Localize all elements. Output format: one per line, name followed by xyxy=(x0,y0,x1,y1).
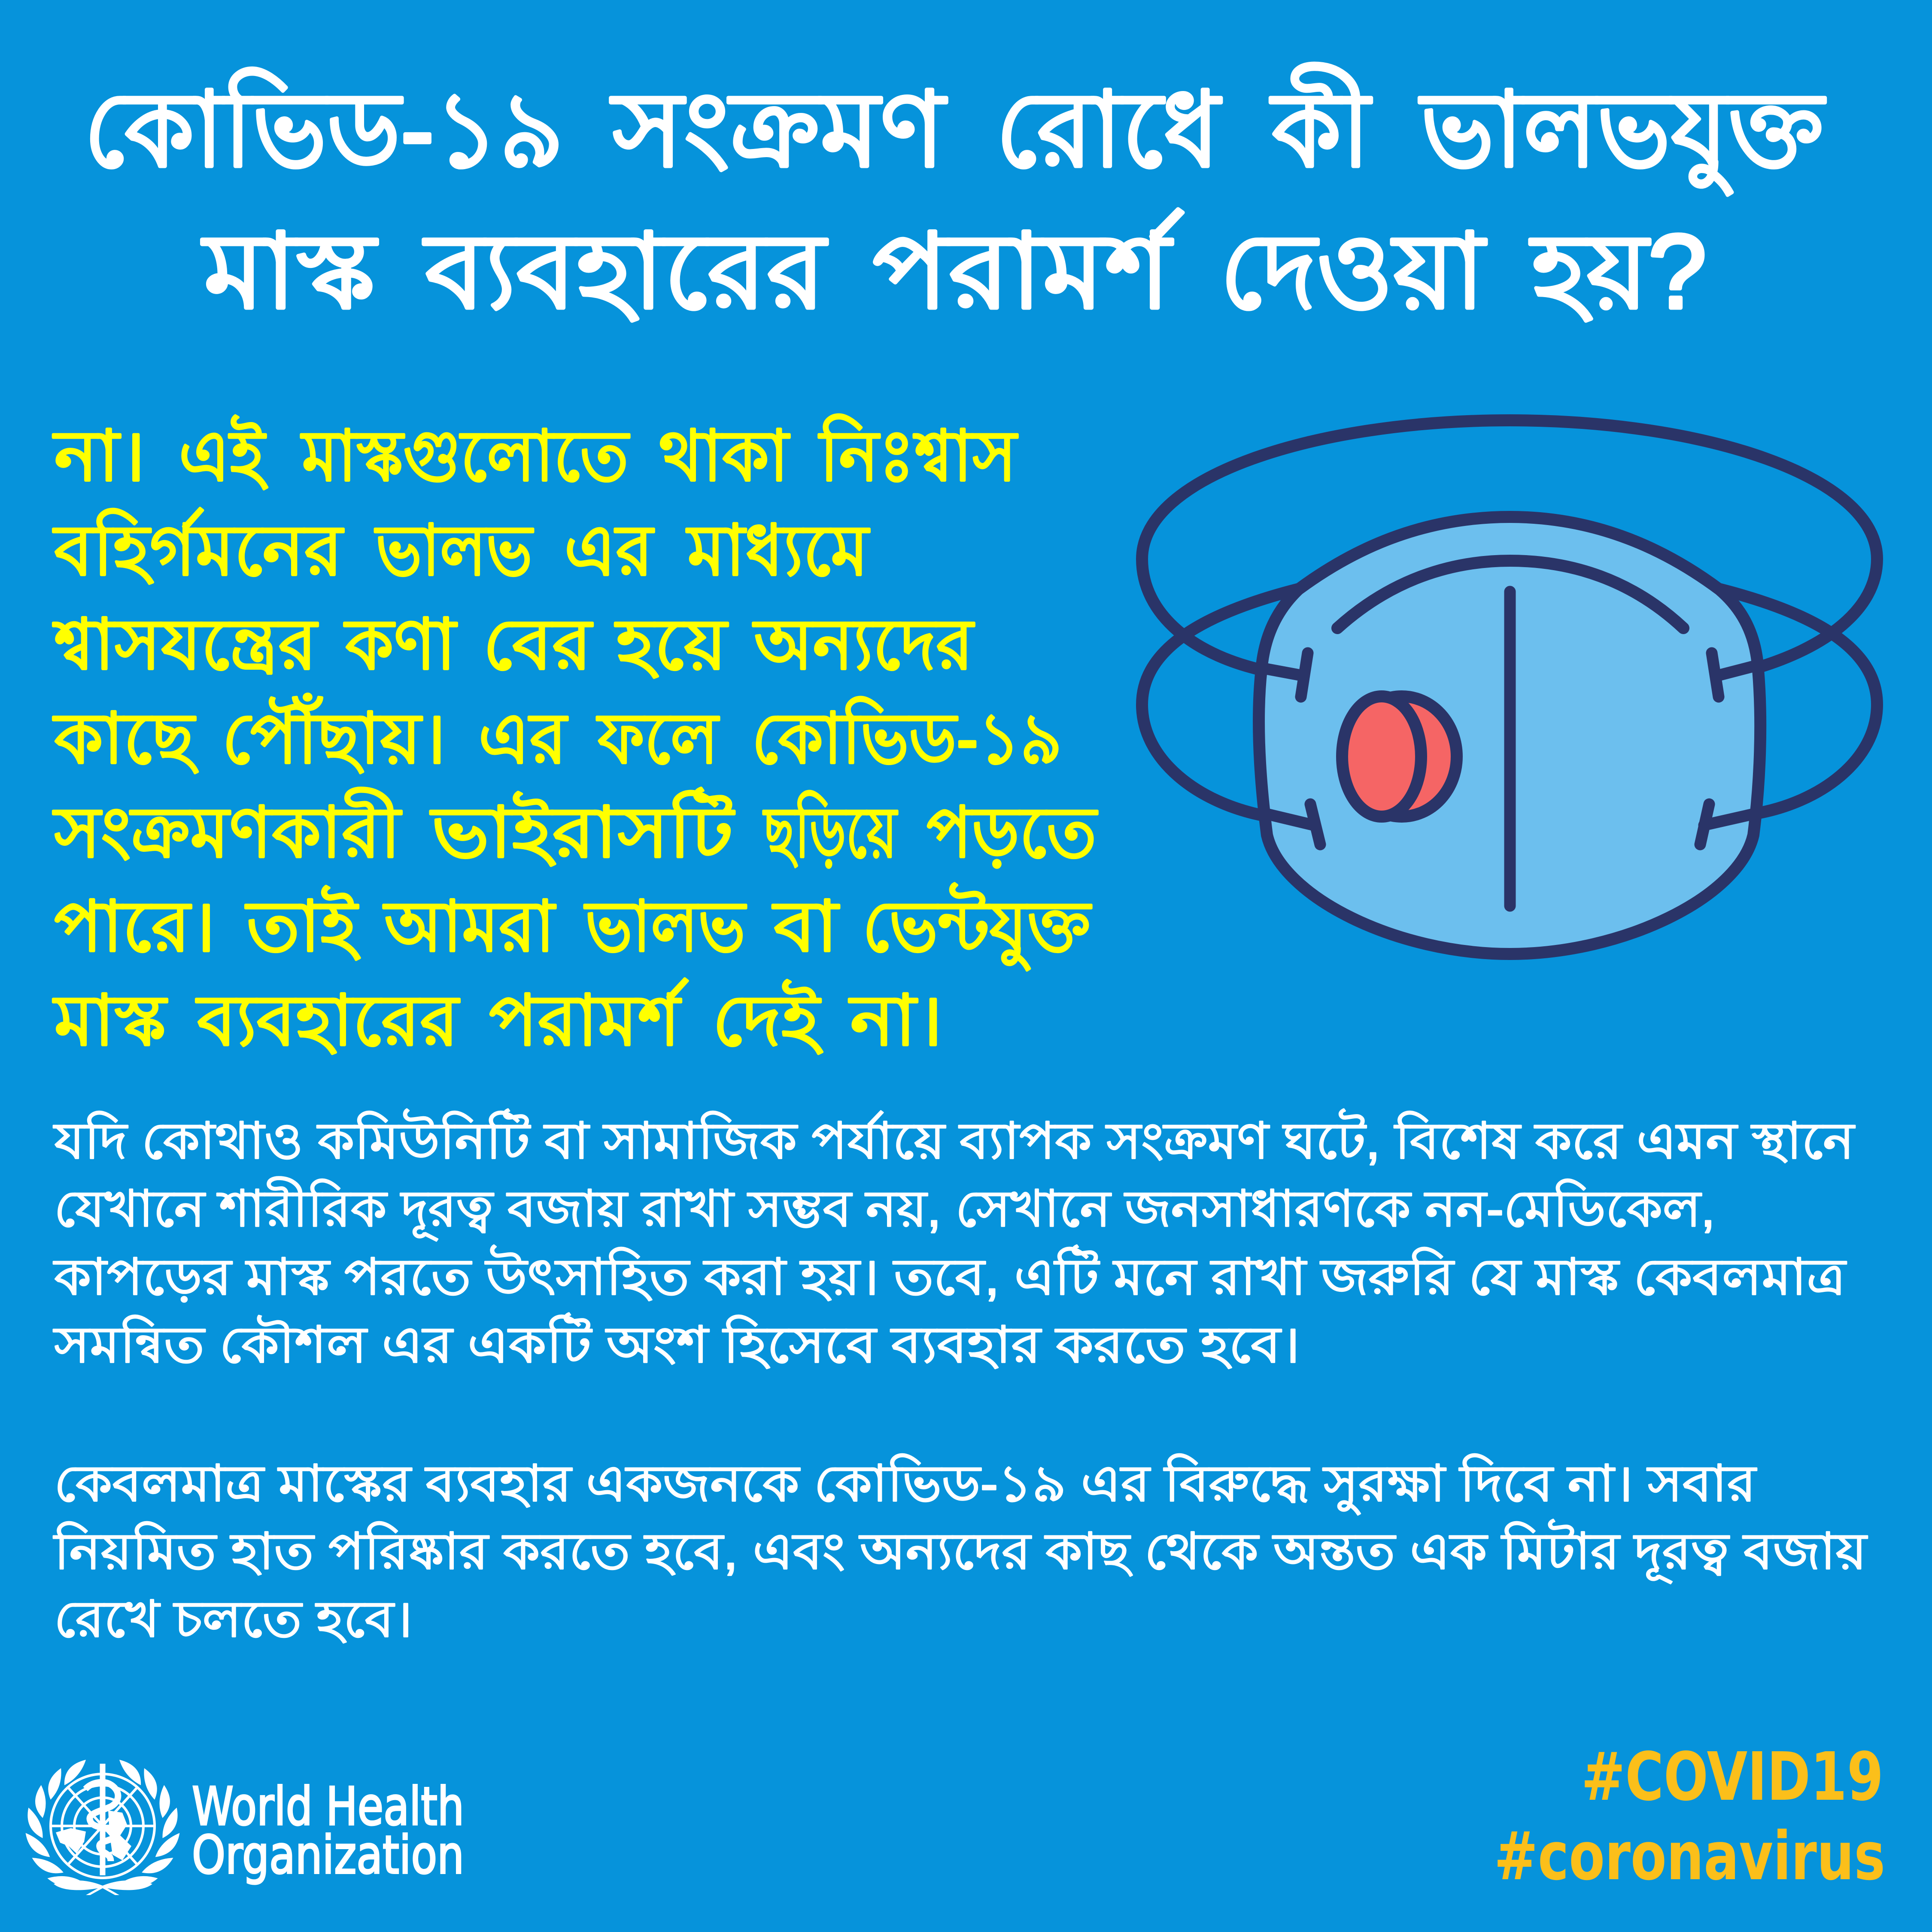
continents xyxy=(56,1810,131,1860)
yellow answer text block: শ্বাসযন্ত্রের xyxy=(53,605,318,684)
yellow answer text block: দেই xyxy=(712,980,822,1060)
body text block 2: রেখে চলতে হবে। xyxy=(54,1591,413,1648)
yellow answer text block: হয়ে xyxy=(615,605,728,684)
centre seam xyxy=(1504,592,1516,906)
yellow answer text block: সংক্রমণকারী xyxy=(53,788,402,872)
yellow answer text block: ফলে xyxy=(596,699,720,778)
yellow answer text block: ছড়িয়ে xyxy=(763,791,898,872)
yellow answer text block: অন্যদের xyxy=(753,605,974,684)
yellow answer text block: কণা xyxy=(344,605,457,684)
body text block 2 xyxy=(53,1454,1868,1648)
lower ear strap xyxy=(1142,588,1877,816)
title line 2: দেওয়া xyxy=(1220,213,1486,330)
laurel wreath xyxy=(25,1759,180,1895)
ribbon xyxy=(54,1880,152,1895)
yellow answer text block: কোভিড-১৯ xyxy=(752,697,1062,778)
upper ear strap xyxy=(1142,420,1877,672)
yellow answer text block: পৌঁছায়। xyxy=(222,694,446,778)
yellow answer text block: তাই xyxy=(245,886,360,966)
icon: WHO emblem xyxy=(25,1759,180,1895)
title line 2 xyxy=(202,210,1707,330)
title line 2: মাস্ক xyxy=(202,213,377,330)
yellow answer text block: বের xyxy=(483,605,592,684)
yellow answer text block: ভাইরাসটি xyxy=(430,788,735,872)
title line 1: ভালভযুক্ত xyxy=(1419,71,1826,195)
title line 2: পরামর্শ xyxy=(872,210,1183,330)
yellow answer text block: থাকা xyxy=(659,416,790,495)
title line 1: কোভিড-১৯ xyxy=(84,68,564,188)
yellow answer text block: নিঃশ্বাস xyxy=(818,415,1018,495)
WHO wordmark xyxy=(192,1776,464,1886)
title line 1: রোধে xyxy=(996,71,1221,188)
title line 2: ব্যবহারের xyxy=(423,213,827,330)
title line 1: সংক্রমণ xyxy=(611,71,947,188)
yellow answer text block: ব্যবহারের xyxy=(196,981,459,1060)
yellow answer text block: এর xyxy=(564,511,654,590)
yellow answer text block: কাছে xyxy=(53,699,198,778)
body text block 1: যদি কোথাও কমিউনিটি বা সামাজিক পর্যায়ে ব্যাপক সংক্রমণ ঘটে, বিশেষ করে এমন স্থানে xyxy=(53,1109,1855,1170)
title line 2: হয়? xyxy=(1530,213,1707,330)
yellow answer text block: ভেন্টযুক্ত xyxy=(863,884,1091,970)
title line 1: কী xyxy=(1270,64,1372,188)
yellow answer text block: বা xyxy=(772,887,839,966)
yellow answer text block: মাস্ক xyxy=(53,981,167,1060)
body text block 2: নিয়মিত হাত পরিষ্কার করতে হবে, এবং অন্যদের কাছ থেকে অন্তত এক মিটার দূরত্ব বজায় xyxy=(53,1519,1868,1583)
hashtags xyxy=(1494,1738,1885,1895)
WHO wordmark: Organization xyxy=(192,1825,464,1886)
body text block 1 xyxy=(53,1109,1855,1373)
body text block 1: কাপড়ের মাস্ক পরতে উৎসাহিত করা হয়। তবে, এটি মনে রাখা জরুরি যে মাস্ক কেবলমাত্র xyxy=(53,1245,1847,1306)
yellow answer text block: না। xyxy=(849,981,943,1060)
title line 1 xyxy=(84,64,1826,195)
title xyxy=(84,64,1826,330)
yellow answer text block: পড়তে xyxy=(927,793,1097,872)
yellow answer text block: আমরা xyxy=(383,887,556,966)
yellow answer text block: মাস্কগুলোতে xyxy=(301,416,629,495)
yellow answer text block xyxy=(53,415,1097,1060)
yellow answer text block: বহির্গমনের xyxy=(53,508,343,590)
mask body xyxy=(1259,517,1760,954)
exhalation valve xyxy=(1342,696,1457,817)
yellow answer text block: ভালভ xyxy=(584,887,747,966)
yellow answer text block: এই xyxy=(179,416,267,495)
yellow answer text block: পরামর্শ xyxy=(489,979,688,1060)
body text block 1: যেখানে শারীরিক দূরত্ব বজায় রাখা সম্ভব নয়, সেখানে জনসাধারণকে নন-মেডিকেল, xyxy=(54,1177,1715,1241)
icon: valve mask xyxy=(1142,420,1877,954)
WHO logo xyxy=(25,1759,464,1895)
yellow answer text block: না। xyxy=(53,416,146,495)
yellow answer text block: পারে। xyxy=(54,887,216,966)
body text block 1: সমন্বিত কৌশল এর একটি অংশ হিসেবে ব্যবহার করতে হবে। xyxy=(53,1313,1300,1373)
body text block 2: কেবলমাত্র মাস্কের ব্যবহার একজনকে কোভিড-১৯ এর বিরুদ্ধে সুরক্ষা দিবে না। সবার xyxy=(54,1454,1757,1515)
rod and serpent xyxy=(85,1764,118,1875)
yellow answer text block: ভালভ xyxy=(374,511,534,590)
nose wire xyxy=(1337,561,1683,628)
yellow answer text block: মাধ্যমে xyxy=(686,511,869,590)
strap fasteners xyxy=(1262,653,1753,844)
yellow answer text block: এর xyxy=(478,699,568,778)
globe lines xyxy=(51,1774,155,1878)
WHO wordmark: World Health xyxy=(192,1776,464,1837)
